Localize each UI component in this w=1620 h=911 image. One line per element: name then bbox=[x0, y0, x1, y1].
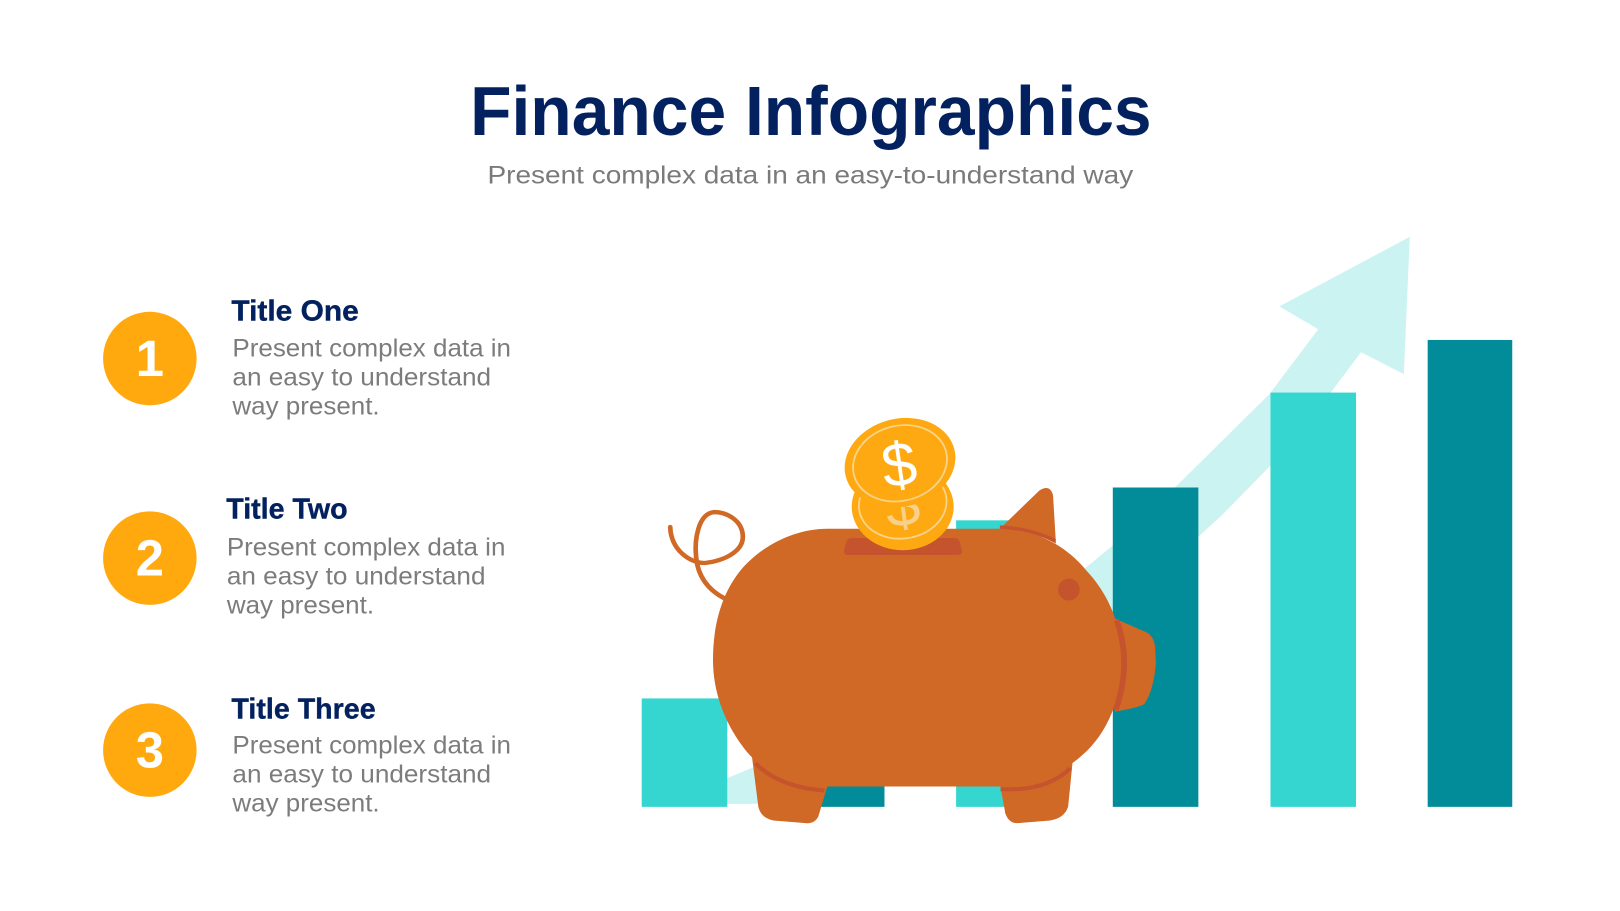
badge 1 bbox=[103, 312, 197, 405]
piggy bank bbox=[670, 488, 1156, 823]
badge 3 bbox=[103, 703, 197, 797]
leg bands bbox=[755, 763, 1070, 791]
front coin bbox=[835, 406, 965, 519]
item one bbox=[103, 295, 511, 420]
item three heading: Title Three bbox=[231, 693, 376, 725]
pig tail bbox=[670, 512, 743, 599]
arrow: rising trend bbox=[696, 237, 1410, 804]
badge 3: 3 bbox=[136, 722, 164, 779]
bar chart bbox=[642, 340, 1512, 807]
title: Finance Infographics bbox=[470, 72, 1152, 150]
item one body bbox=[231, 335, 511, 420]
badge 1: 1 bbox=[136, 330, 164, 387]
pig snout bbox=[1115, 619, 1156, 712]
item two bbox=[103, 493, 505, 619]
item two heading: Title Two bbox=[226, 493, 348, 525]
item three body: way present. bbox=[231, 789, 380, 817]
pig eye bbox=[1058, 579, 1080, 601]
item three body: an easy to understand bbox=[232, 760, 491, 788]
ear band bbox=[1000, 527, 1055, 541]
bar 1 bbox=[642, 698, 727, 807]
front coin: $ bbox=[877, 429, 921, 502]
item one body: an easy to understand bbox=[232, 364, 491, 392]
item two body: an easy to understand bbox=[227, 563, 486, 591]
coin slot bbox=[844, 538, 962, 555]
layout bbox=[103, 72, 1512, 823]
item three body bbox=[231, 732, 511, 817]
bar 2 bbox=[799, 756, 884, 807]
item two body: Present complex data in bbox=[227, 534, 505, 562]
item three bbox=[103, 693, 511, 817]
pig ear bbox=[1000, 488, 1056, 544]
back coin bbox=[852, 463, 954, 550]
bar 6 bbox=[1428, 340, 1512, 807]
back coin: $ bbox=[880, 469, 924, 542]
pig body bbox=[713, 529, 1122, 787]
item one heading: Title One bbox=[231, 295, 359, 327]
pig left leg bbox=[751, 750, 827, 823]
item two body: way present. bbox=[226, 591, 374, 619]
badge 2: 2 bbox=[136, 530, 164, 587]
badge 2 bbox=[103, 511, 197, 605]
snout band bbox=[1116, 620, 1124, 710]
bar 3 bbox=[956, 520, 1042, 807]
bar 5 bbox=[1270, 393, 1356, 807]
subtitle: Present complex data in an easy-to-understand way bbox=[488, 162, 1134, 190]
pig right leg bbox=[1000, 763, 1072, 823]
item one body: Present complex data in bbox=[232, 335, 511, 363]
item two body bbox=[226, 534, 505, 619]
item three body: Present complex data in bbox=[232, 732, 511, 760]
bar 4 bbox=[1113, 488, 1198, 807]
item one body: way present. bbox=[231, 392, 380, 420]
